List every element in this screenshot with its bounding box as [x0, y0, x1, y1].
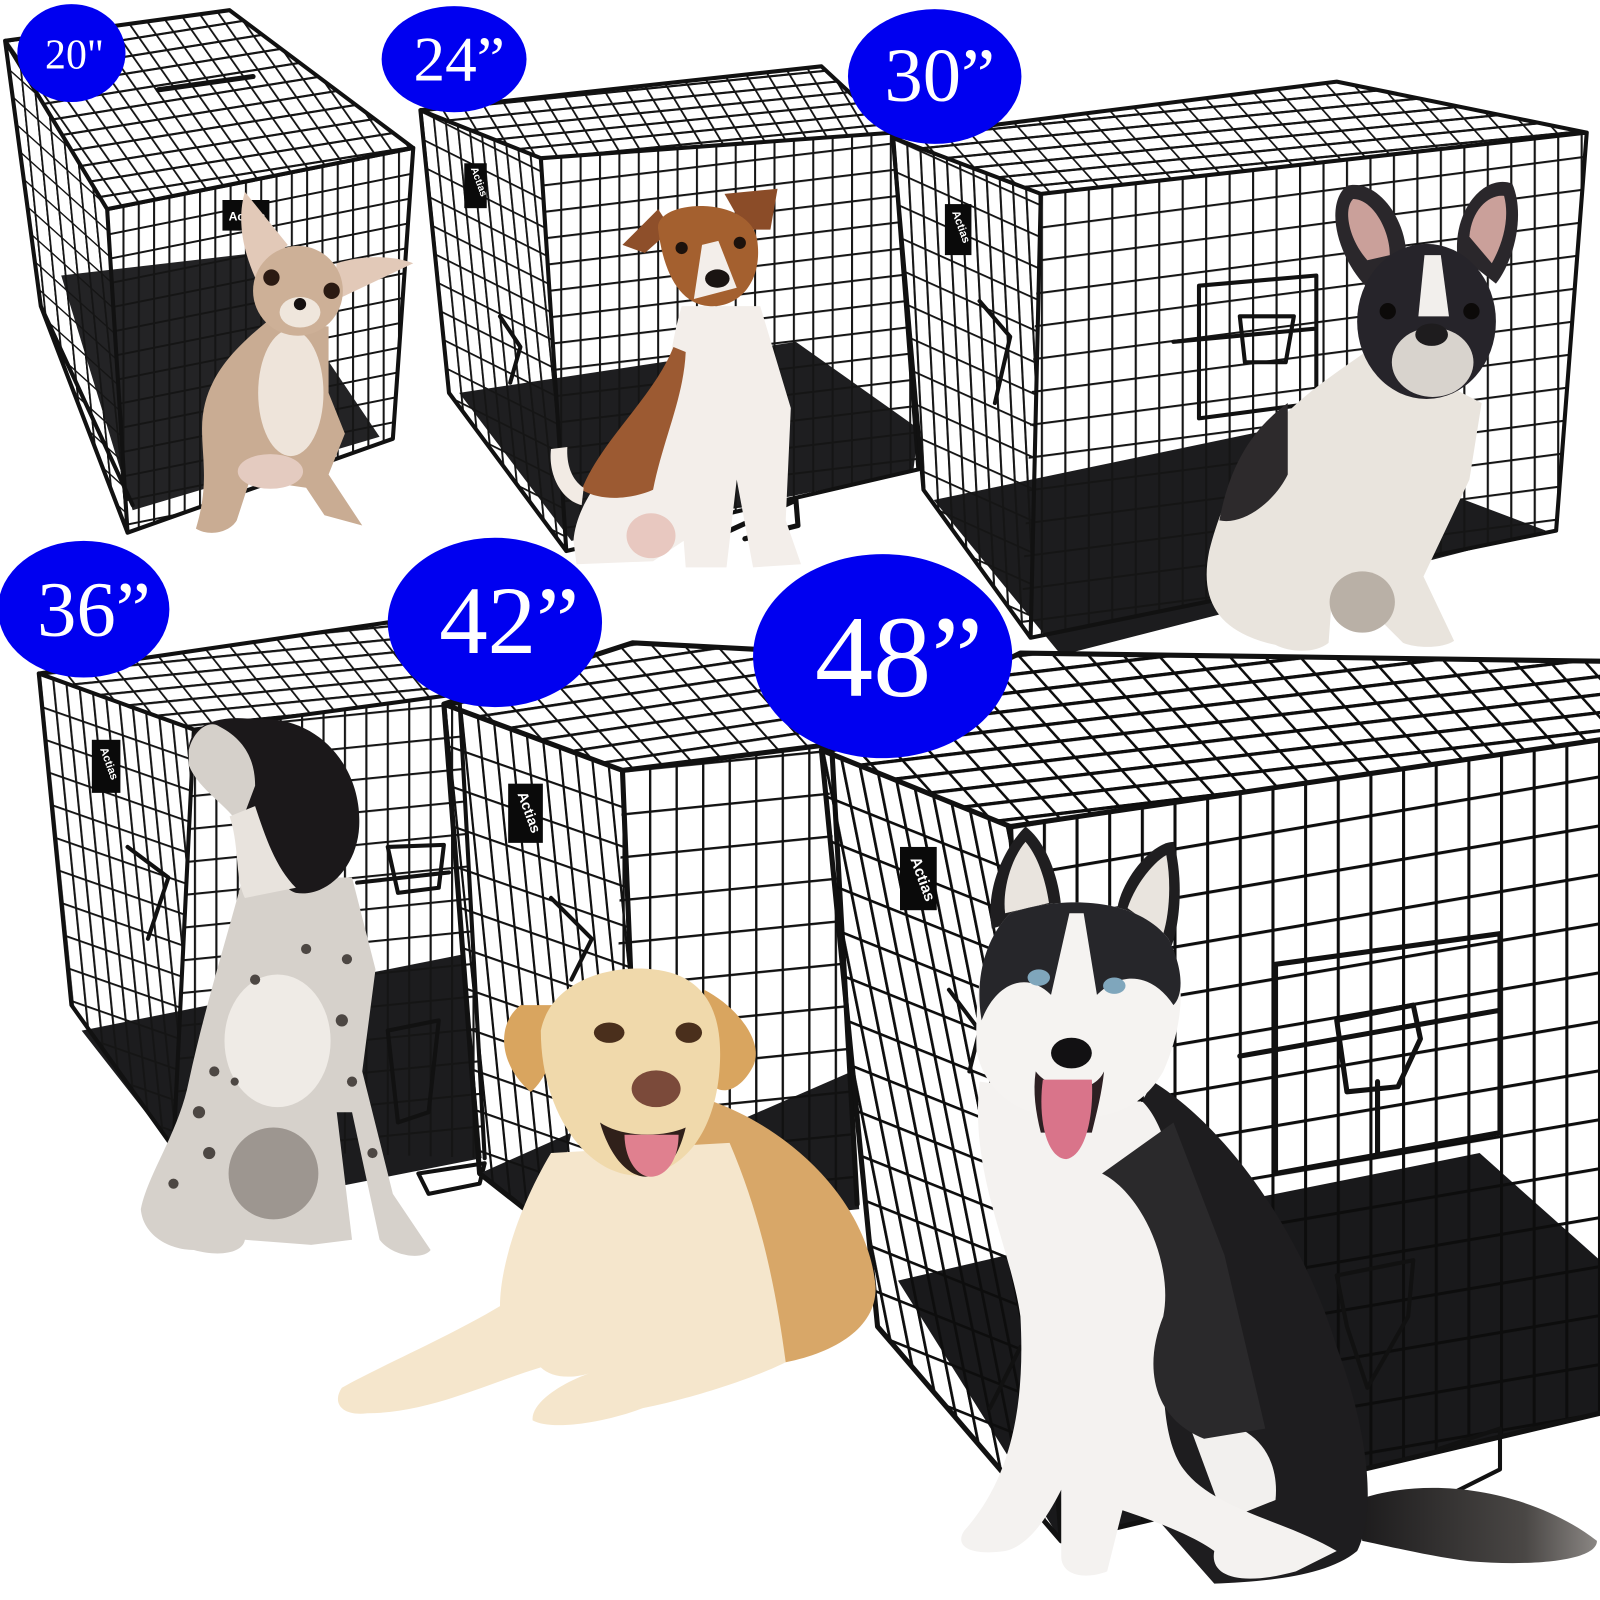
badge: 30 inch	[848, 9, 1021, 144]
badge: 48 inch: 48”	[815, 593, 983, 722]
badge: 48 inch	[753, 554, 1012, 758]
badge: 24 inch	[382, 6, 527, 112]
badge: 30 inch: 30”	[885, 33, 995, 118]
cage: 20 inch	[5, 10, 413, 533]
cage: 48 inch	[821, 653, 1600, 1541]
badge: 20 inch: 20"	[45, 32, 104, 78]
cage: 36 inch: Actias	[97, 746, 120, 782]
badge: 42 inch	[388, 538, 602, 707]
cage: 48 inch: Actias	[906, 855, 938, 904]
cage: 24 inch	[420, 66, 918, 551]
cage: 20 inch: Actias	[229, 209, 265, 223]
dog: jack russell	[551, 189, 801, 567]
dog: spaniel	[141, 718, 431, 1256]
cage: 42 inch: Actias	[514, 790, 543, 836]
badge: 36 inch: 36”	[37, 566, 151, 653]
dog: labrador	[338, 968, 876, 1425]
badge: 36 inch	[0, 541, 169, 678]
dog: husky	[961, 827, 1597, 1584]
dog: french bulldog	[1207, 182, 1518, 651]
badge: 42 inch: 42”	[439, 567, 579, 674]
badge: 20 inch	[17, 4, 126, 102]
cage: 24 inch: Actias	[468, 166, 489, 199]
cage: 30 inch: Actias	[949, 209, 972, 245]
cage: 30 inch	[893, 82, 1587, 655]
badge: 24 inch: 24”	[414, 25, 505, 95]
dog: chihuahua	[196, 192, 413, 533]
cage: 42 inch	[444, 643, 859, 1230]
cage: 36 inch	[39, 622, 485, 1194]
